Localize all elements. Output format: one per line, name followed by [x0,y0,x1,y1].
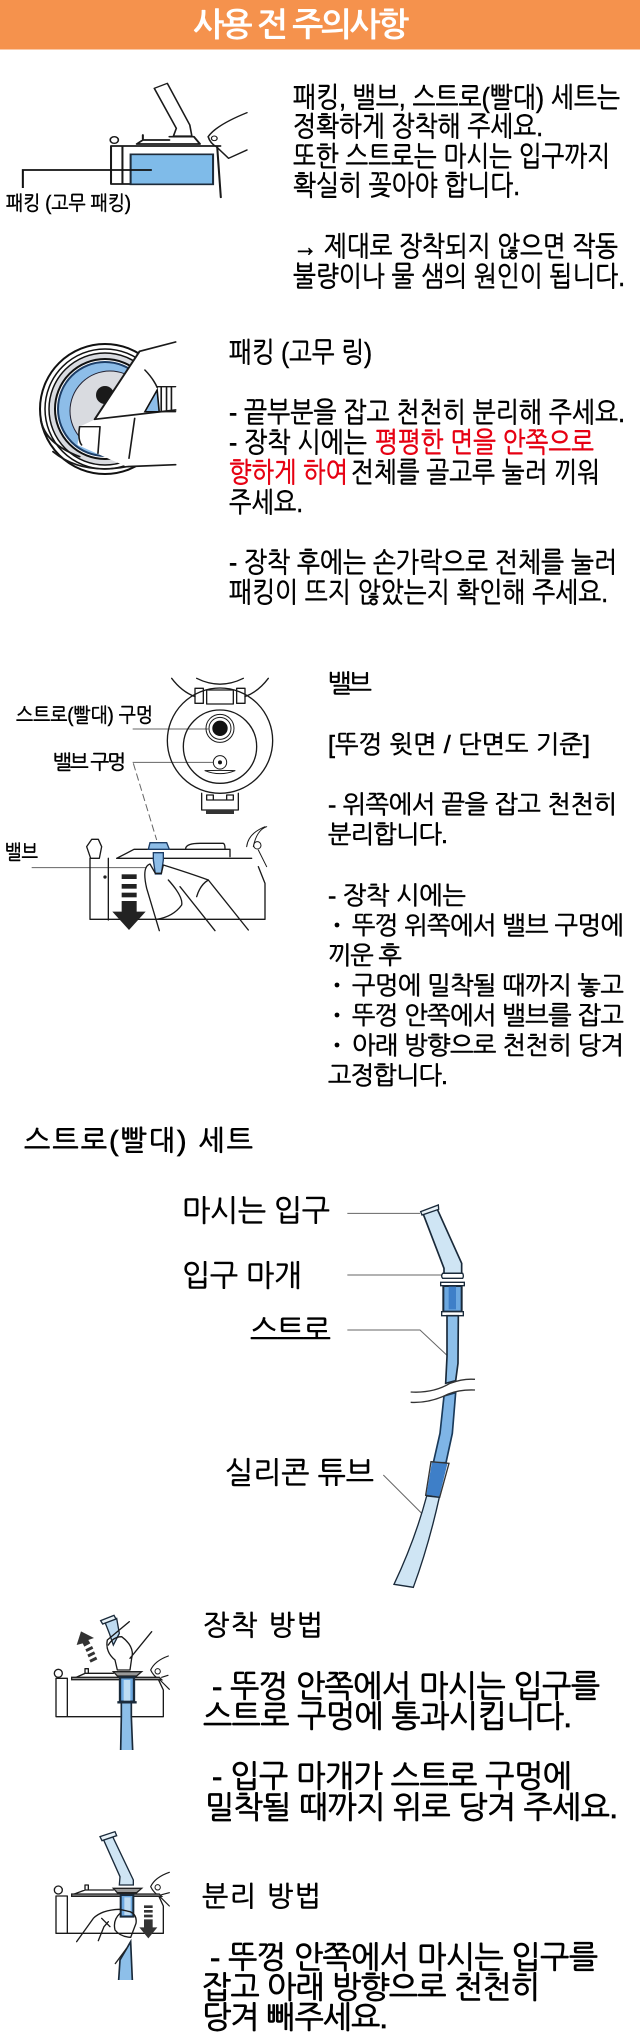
labels: straw parts: 스트로 [250,1315,331,1348]
illustration: straw set [347,1205,475,1587]
text block: attaching method [203,1610,618,1825]
text block: detaching method: - 뚜껑 안쪽에서 마시는 입구를 [210,1940,598,1975]
label: gasket: 패킹 (고무 패킹) [6,193,131,215]
hand [41,341,204,469]
text block: valve: 끼운 후 [328,942,402,970]
text block: attaching method: 스트로 구멍에 통과시킵니다. [203,1699,572,1734]
labels: straw parts [182,1195,374,1490]
text block: detaching method: 당겨 빼주세요. [202,2000,388,2035]
text block: rubber ring: 전체를 골고루 눌러 끼워 [351,457,600,488]
text block: detaching method [202,1881,598,2035]
text block: valve: 분리합니다. [328,821,448,849]
text block: valve: - 위쪽에서 끝을 잡고 천천히 [328,791,617,819]
text block: rubber ring [229,337,625,608]
text block: rubber ring: 향하게 하여 [229,457,348,488]
illustration: lid with gasket [23,83,247,197]
illustration: attaching straw [54,1615,169,1750]
labels: straw parts: 입구 마개 [182,1260,302,1293]
header banner [0,0,640,50]
text block: valve: 밸브 [328,670,372,698]
text block: attaching method: - 입구 마개가 스트로 구멍에 [212,1759,572,1794]
text block: attaching method: 장착 방법 [203,1610,323,1641]
illustration: valve top view and section [32,678,273,931]
text block: valve: [뚜껑 윗면 / 단면도 기준] [328,731,590,759]
labels: straw parts: 마시는 입구 [182,1195,330,1228]
labels: straw parts: 실리콘 튜브 [225,1457,374,1490]
labels: valve illustration: 밸브 [5,842,38,864]
ring [40,344,170,474]
labels: valve illustration: 스트로(빨대) 구멍 [16,705,153,727]
text block: valve: 뚜껑 안쪽에서 밸브를 잡고 [352,1002,624,1030]
text block: valve: - 장착 시에는 [328,882,466,910]
labels: valve illustration: 밸브 구멍 [53,752,126,774]
text block: set installation notes [293,82,625,292]
heading: straw set: 스트로(빨대) 세트 [24,1125,253,1156]
text block: valve: 뚜껑 위쪽에서 밸브 구멍에 [352,912,624,940]
labels: valve illustration [5,705,153,864]
text block: rubber ring: 평평한 면을 안쪽으로 [375,427,594,458]
text block: valve: 구멍에 밀착될 때까지 놓고 [352,972,624,1000]
text block: valve [328,670,624,1090]
text block: detaching method: 분리 방법 [202,1881,321,1912]
text block: attaching method: 밀착될 때까지 위로 당겨 주세요. [205,1790,618,1825]
text block: valve: 아래 방향으로 천천히 당겨 [352,1032,624,1060]
text block: attaching method: - 뚜껑 안쪽에서 마시는 입구를 [212,1669,600,1704]
text block: set installation notes: 확실히 꽂아야 합니다. [293,170,520,201]
text block: rubber ring: 주세요. [229,487,303,518]
title: 사용 전 주의사항 [193,6,409,43]
illustration: removing rubber ring [40,341,204,474]
text block: rubber ring: - 장착 시에는 [229,427,367,458]
text block: valve: 고정합니다. [328,1062,448,1090]
text block: rubber ring: 패킹 (고무 링) [229,337,372,368]
text block: detaching method: 잡고 아래 방향으로 천천히 [202,1970,540,2005]
illustration: detaching straw [54,1832,169,1980]
text block: set installation notes: 정확하게 장착해 주세요. [293,111,543,142]
